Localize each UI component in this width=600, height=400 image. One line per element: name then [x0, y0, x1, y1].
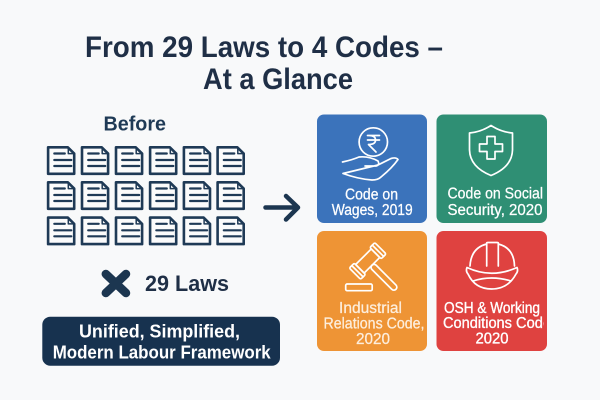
- icon: cross mark: [106, 274, 126, 293]
- panel: code on social security: [436, 114, 547, 223]
- arrow: [266, 196, 298, 220]
- banner: unified framework: Modern Labour Framework: [53, 342, 272, 362]
- panel: industrial relations code: [317, 231, 427, 351]
- title: [85, 31, 443, 96]
- icon: hand holding rupee: [342, 128, 398, 180]
- icon grid: 18 law documents: [48, 147, 244, 244]
- panel: osh and working conditions code: OSH & Working: [444, 300, 540, 317]
- icon: hard hat: [466, 242, 518, 289]
- panel: code on wages: [317, 114, 427, 223]
- panel: code on social security: Security, 2020: [448, 202, 543, 219]
- panel: industrial relations code: Industrial: [339, 300, 402, 317]
- panel: industrial relations code: Relations Code,: [324, 316, 424, 332]
- panel: osh and working conditions code: Conditions Code,: [443, 315, 555, 332]
- title: From 29 Laws to 4 Codes –: [85, 31, 443, 64]
- icon: gavel: [346, 243, 409, 302]
- panel: osh and working conditions code: 2020: [476, 330, 509, 348]
- panel: code on wages: Code on: [345, 186, 398, 203]
- icon: shield with cross: [470, 126, 512, 176]
- banner: unified framework: Unified, Simplified,: [79, 321, 240, 341]
- banner: unified framework: [42, 317, 280, 366]
- panel: industrial relations code: 2020: [356, 331, 390, 348]
- panel: osh and working conditions code: [436, 231, 555, 351]
- label: 29 laws: 29 Laws: [145, 271, 229, 296]
- heading: before: Before: [104, 114, 166, 136]
- panel: code on wages: Wages, 2019: [332, 202, 413, 219]
- panel: code on social security: Code on Social: [448, 186, 543, 202]
- title: At a Glance: [203, 63, 353, 96]
